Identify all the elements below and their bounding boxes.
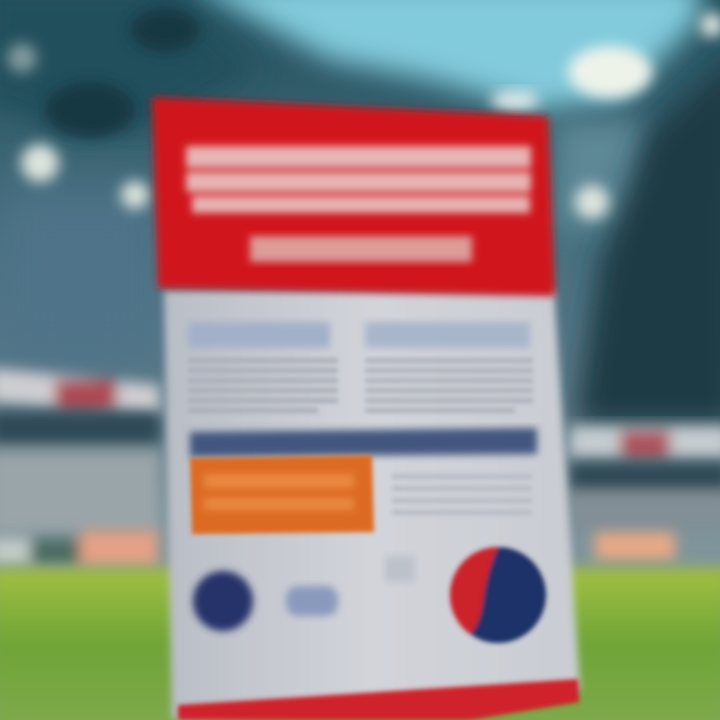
icon: small blue mark xyxy=(286,586,338,616)
headline line two xyxy=(250,236,472,262)
cloud top center xyxy=(491,90,539,110)
right column heading xyxy=(365,322,530,348)
poster xyxy=(152,97,580,720)
headline line one xyxy=(186,146,531,213)
dark left stand xyxy=(0,0,260,130)
red header xyxy=(152,97,555,296)
right text block xyxy=(392,474,532,515)
text columns xyxy=(188,322,533,413)
floodlights xyxy=(7,13,720,219)
poster body xyxy=(164,290,580,720)
pitch-side boards xyxy=(0,530,675,566)
mid right haze xyxy=(555,120,645,230)
lower stands xyxy=(0,412,720,532)
left column heading xyxy=(188,322,330,348)
icon: navy circle xyxy=(193,571,253,631)
cloud top right xyxy=(568,46,652,98)
left stadium band xyxy=(0,368,160,415)
right stadium band xyxy=(570,426,720,458)
right column body xyxy=(365,358,533,413)
orange callout xyxy=(190,455,374,534)
red footer strip xyxy=(178,679,579,720)
header panel xyxy=(152,97,555,296)
left upper haze xyxy=(0,190,160,370)
left column body xyxy=(188,358,338,413)
dark right stand xyxy=(575,50,720,425)
orange box xyxy=(190,455,374,534)
dark blotches upper left xyxy=(45,8,200,138)
callout text xyxy=(204,474,354,510)
grass pitch xyxy=(0,568,720,720)
pale text mark xyxy=(385,556,415,582)
pie chart xyxy=(450,547,546,643)
sky xyxy=(180,0,700,110)
navy divider bar xyxy=(190,428,537,457)
